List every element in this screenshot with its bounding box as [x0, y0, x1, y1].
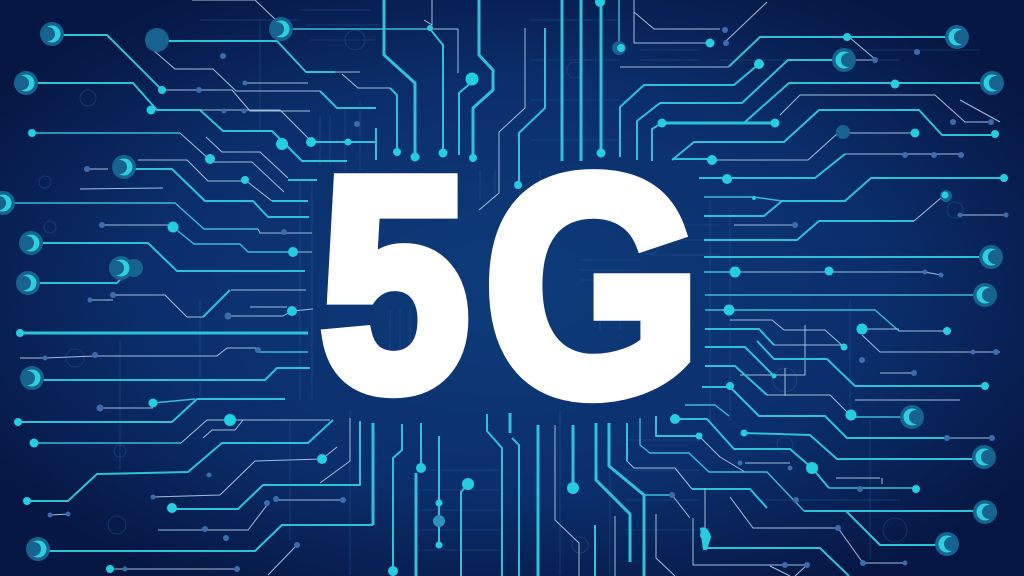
connector hubs: left — [0, 17, 293, 561]
title: 5G: G — [484, 112, 701, 459]
traces: bottom right — [538, 295, 1000, 576]
traces: bottom centre — [373, 413, 519, 576]
connector hubs: right — [832, 25, 1004, 556]
title: 5G — [320, 112, 701, 459]
traces: top centre — [290, 0, 767, 210]
traces: top right — [620, 33, 1008, 278]
traces: bottom left — [14, 290, 373, 575]
traces: top left — [3, 0, 390, 283]
title: 5G: 5 — [320, 115, 469, 452]
